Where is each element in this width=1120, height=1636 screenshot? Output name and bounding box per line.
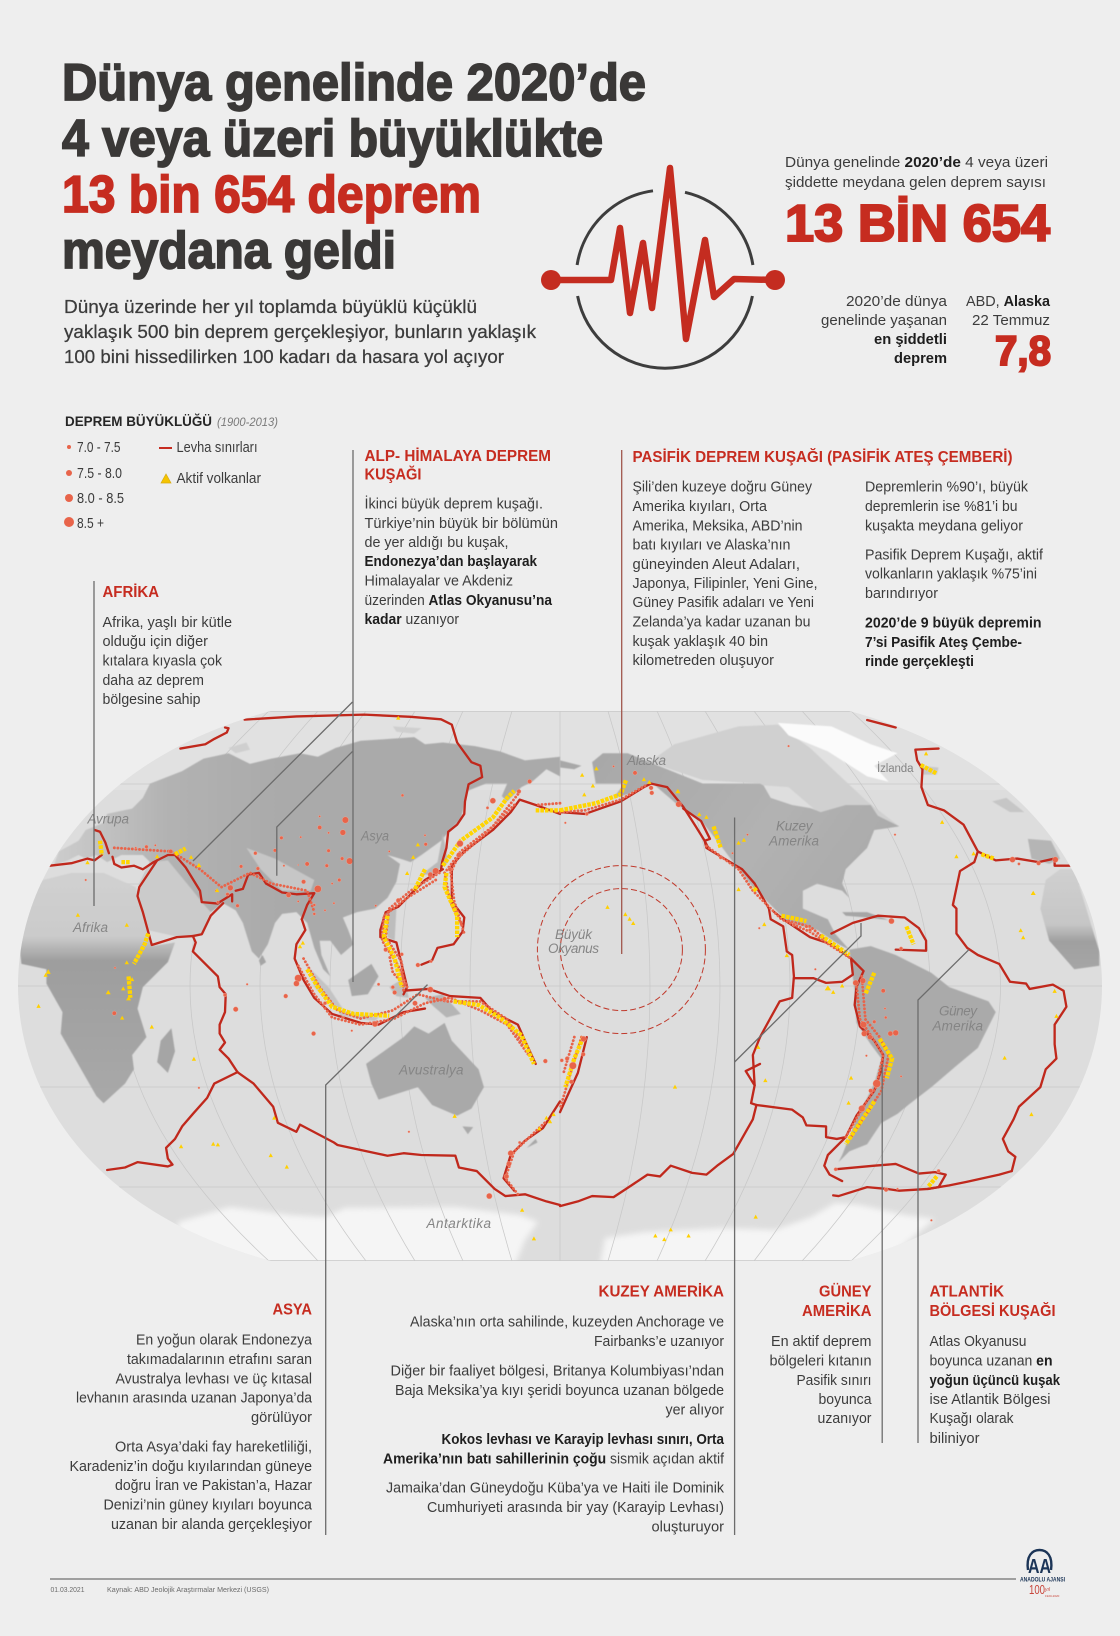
- panel: Asya: Denizi’nin güney kıyıları boyunca: [104, 1498, 313, 1514]
- panel: Atlantik bölgesi kuşağı: Kuşağı olarak: [930, 1411, 1014, 1427]
- panel: Afrika: AFRİKA: [102, 583, 159, 601]
- logo: Anadolu Ajansı: 100: [1029, 1582, 1045, 1597]
- logo: Anadolu Ajansı: [1020, 1550, 1065, 1598]
- stat: yearly earthquake count: şiddette meydana gelen deprem sayısı: [785, 175, 1046, 191]
- panel: Alp-Himalaya deprem kuşağı: KUŞAĞI: [364, 464, 422, 484]
- title: 4 veya üzeri büyüklükte: [62, 110, 603, 168]
- panel: Güney Amerika: AMERİKA: [802, 1302, 872, 1320]
- legend: (1900-2013): [217, 415, 278, 429]
- panel: Pasifik deprem kuşağı: Japonya, Filipinler, Yeni Gine,: [632, 576, 818, 592]
- orange small quake chains: [560, 785, 889, 1137]
- panel: Kuzey Amerika: Alaska’nın orta sahilinde, kuzeyden Anchorage ve: [410, 1314, 724, 1330]
- Antarctica: [178, 1203, 935, 1265]
- panel: Pasifik deprem kuşağı: rinde gerçekleşti: [865, 654, 974, 670]
- legend: 7.0 - 7.5: [77, 440, 120, 456]
- panel: Pasifik deprem kuşağı: Güney Pasifik adaları ve Yeni: [632, 595, 814, 611]
- panel: Güney Amerika: boyunca: [818, 1392, 872, 1408]
- panel: Pasifik deprem kuşağı: volkanların yaklaşık %75’ini: [865, 566, 1037, 582]
- panel: Pasifik deprem kuşağı: Pasifik Deprem Kuşağı, aktif: [865, 548, 1044, 564]
- panel: Atlantik bölgesi kuşağı: ise Atlantik Bölgesi: [930, 1392, 1050, 1408]
- panel: Asya: Karadeniz’in doğu kıyılarından güneye: [70, 1459, 312, 1475]
- panel: Güney Amerika: En aktif deprem: [771, 1334, 872, 1350]
- title: meydana geldi: [62, 222, 396, 280]
- stat: strongest earthquake: genelinde yaşanan: [821, 313, 947, 329]
- stat: strongest earthquake: 2020’de dünya: [846, 294, 948, 310]
- panel: Alp-Himalaya deprem kuşağı: Himalayalar ve Akdeniz: [364, 574, 513, 590]
- legend: 8.0 - 8.5: [77, 491, 124, 507]
- panel: Güney Amerika: uzanıyor: [818, 1411, 872, 1427]
- world map: [0, 700, 1120, 1270]
- map labels: Alaska: [626, 753, 666, 768]
- title: 13 bin 654 deprem: [62, 166, 481, 224]
- panel: Güney Amerika: [770, 1282, 872, 1427]
- stat: strongest earthquake: ABD, Alaska: [966, 294, 1051, 310]
- panel: Kuzey Amerika: Cumhuriyeti arasında bir yay (Karayip Levhası): [427, 1500, 724, 1516]
- graticule: [0, 711, 1120, 1261]
- map labels: [72, 753, 983, 1231]
- panel: Alp-Himalaya deprem kuşağı: Endonezya’dan başlayarak: [364, 554, 538, 570]
- panel: Kuzey Amerika: Fairbanks’e uzanıyor: [594, 1334, 724, 1350]
- panel: Kuzey Amerika: Amerika’nın batı sahillerinin çoğu sismik açıdan aktif: [383, 1452, 725, 1468]
- panel: Pasifik deprem kuşağı: Amerika, Meksika, ABD’nin: [632, 518, 802, 534]
- panel: Pasifik deprem kuşağı: kuşakta meydana geliyor: [865, 518, 1023, 534]
- panel: Pasifik deprem kuşağı: Amerika kıyıları, Orta: [632, 499, 768, 515]
- plate boundaries: [560, 720, 1071, 1206]
- panel: Pasifik deprem kuşağı: kilometreden oluşuyor: [632, 653, 774, 669]
- subtitle text block: 100 bini hissedilirken 100 kadarı da hasara yol açıyor: [64, 346, 504, 367]
- plate boundaries: [50, 715, 560, 1205]
- panel: Pasifik deprem kuşağı: kuşak yaklaşık 40 bin: [632, 634, 768, 650]
- footer source line: Kaynak: ABD Jeolojik Araştırmalar Merkezi (USGS): [107, 1587, 269, 1594]
- panel: Asya: Orta Asya’daki fay hareketliliği,: [115, 1440, 312, 1456]
- map labels: Büyük: [555, 927, 593, 942]
- map labels: Güney: [939, 1004, 978, 1018]
- subtitle text block: Dünya üzerinde her yıl toplamda büyüklü küçüklü: [64, 296, 477, 317]
- map labels: Okyanus: [548, 941, 599, 956]
- panel: Asya: takımadalarının etrafını saran: [127, 1352, 312, 1368]
- panel: Kuzey Amerika: [383, 1282, 725, 1536]
- stat: yearly earthquake count: 13 BİN 654: [785, 195, 1050, 253]
- panel: Pasifik deprem kuşağı: barındırıyor: [865, 586, 938, 602]
- panel: Kuzey Amerika: KUZEY AMERİKA: [598, 1282, 724, 1300]
- panel: Kuzey Amerika: Kokos levhası ve Karayip levhası sınırı, Orta: [442, 1432, 725, 1448]
- panel: Güney Amerika: bölgeleri kıtanın: [770, 1354, 872, 1370]
- map labels: Amerika: [768, 834, 819, 848]
- map labels: Avustralya: [398, 1062, 464, 1078]
- panel: Afrika: [102, 583, 232, 708]
- logo: Anadolu Ajansı: ANADOLU AJANSI: [1020, 1576, 1065, 1584]
- yellow volcano bands: [560, 765, 994, 1187]
- dashed epicentre circles: [537, 866, 705, 1034]
- subtitle text block: [64, 296, 537, 367]
- panel: Pasifik deprem kuşağı: depremlerin ise %81’i bu: [865, 499, 1018, 515]
- panel: Pasifik deprem kuşağı: 7’si Pasifik Ateş Çembe-: [865, 635, 1022, 651]
- panel: Kuzey Amerika: Diğer bir faaliyet bölgesi, Britanya Kolumbiyası’ndan: [390, 1364, 724, 1380]
- panel: Kuzey Amerika: yer alıyor: [666, 1402, 724, 1418]
- logo: Anadolu Ajansı: 1920-2020: [1045, 1594, 1060, 1598]
- panel: Pasifik deprem kuşağı: güneyinden Aleut Adaları,: [632, 557, 800, 573]
- panel: Atlantik bölgesi kuşağı: [930, 1282, 1061, 1447]
- volcano triangles: [580, 751, 1059, 1241]
- panel: Atlantik bölgesi kuşağı: biliniyor: [930, 1431, 980, 1447]
- orange small quake chains: [114, 794, 560, 1194]
- panel: Alp-Himalaya deprem kuşağı: ALP- HİMALAYA DEPREM: [364, 447, 551, 465]
- panel: Asya: görülüyor: [251, 1410, 312, 1426]
- panel: Atlantik bölgesi kuşağı: Atlas Okyanusu: [930, 1334, 1026, 1350]
- panel: Kuzey Amerika: Baja Meksika’ya kıyı şeridi boyunca uzanan bölgede: [395, 1383, 724, 1399]
- map labels: Amerika: [932, 1018, 983, 1034]
- stat: strongest earthquake: [821, 294, 1051, 374]
- panel: Asya: ASYA: [272, 1302, 312, 1318]
- stat: strongest earthquake: 22 Temmuz: [972, 313, 1050, 329]
- stat: yearly earthquake count: [785, 155, 1050, 253]
- legend: [64, 412, 278, 532]
- legend: Levha sınırları: [176, 440, 258, 456]
- panel: Pasifik deprem kuşağı: batı kıyıları ve Alaska’nın: [632, 538, 790, 554]
- panel: Alp-Himalaya deprem kuşağı: üzerinden Atlas Okyanusu’na: [364, 593, 553, 609]
- panel: Pasifik deprem kuşağı: Depremlerin %90’ı, büyük: [865, 480, 1029, 496]
- stat: yearly earthquake count: Dünya genelinde 2020’de 4 veya üzeri: [785, 155, 1048, 171]
- panel: Pasifik deprem kuşağı: [632, 447, 1044, 670]
- stat: strongest earthquake: 7,8: [995, 327, 1051, 374]
- stat: strongest earthquake: deprem: [894, 351, 947, 367]
- panel: Alp-Himalaya deprem kuşağı: kadar uzanıyor: [364, 612, 459, 628]
- panel: Asya: levhanın arasında uzanan Japonya’da: [76, 1390, 313, 1406]
- panel: Asya: Avustralya levhası ve üç kıtasal: [116, 1372, 312, 1388]
- panel: Asya: [70, 1302, 313, 1533]
- quake dots: [85, 779, 547, 1199]
- map labels: Asya: [360, 828, 389, 844]
- panel: Pasifik deprem kuşağı: Zelanda’ya kadar uzanan bu: [632, 614, 810, 630]
- continents east: [18, 726, 560, 1148]
- title: Dünya genelinde 2020’de: [62, 54, 646, 112]
- panel: Asya: uzanan bir alanda gerçekleşiyor: [111, 1517, 312, 1533]
- panel: Alp-Himalaya deprem kuşağı: İkinci büyük deprem kuşağı.: [364, 494, 543, 512]
- panel: Kuzey Amerika: Jamaika’dan Güneydoğu Küba’ya ve Haiti ile Dominik: [386, 1480, 725, 1496]
- panel: Pasifik deprem kuşağı: PASİFİK DEPREM KUŞAĞI (PASİFİK ATEŞ ÇEMBERİ): [632, 447, 1012, 466]
- logo: Anadolu Ajansı: yıl: [1044, 1587, 1051, 1593]
- panel: Güney Amerika: Pasifik sınırı: [796, 1373, 872, 1389]
- land and data: Eastern hemisphere side: [18, 715, 560, 1240]
- callout leader lines: [94, 450, 969, 1535]
- panel: Atlantik bölgesi kuşağı: ATLANTİK: [930, 1282, 1004, 1300]
- stat: strongest earthquake: en şiddetli: [874, 332, 947, 348]
- continents west: [560, 723, 1099, 1162]
- panel: Afrika: bölgesine sahip: [102, 692, 200, 708]
- panel: Kuzey Amerika: oluşturuyor: [652, 1520, 724, 1536]
- panel: Alp-Himalaya deprem kuşağı: de yer aldığı bu kuşak,: [364, 535, 508, 551]
- panel: Pasifik deprem kuşağı: 2020’de 9 büyük depremin: [865, 616, 1042, 632]
- icon: seismograph in a circle: [541, 168, 785, 368]
- title: [62, 54, 646, 280]
- panel: Alp-Himalaya deprem kuşağı: [364, 447, 558, 628]
- legend: Aktif volkanlar: [176, 471, 261, 487]
- map labels: Antarktika: [426, 1216, 491, 1231]
- legend: 7.5 - 8.0: [77, 466, 122, 482]
- legend: 8.5 +: [77, 516, 104, 532]
- volcano triangles: [36, 716, 556, 1240]
- panel: Güney Amerika: GÜNEY: [819, 1282, 872, 1300]
- subtitle text block: yaklaşık 500 bin deprem gerçekleşiyor, bunların yaklaşık: [64, 321, 537, 342]
- footer source line: 01.03.2021: [50, 1587, 85, 1594]
- quake dots: [560, 745, 1058, 1221]
- map labels: İzlanda: [877, 762, 914, 775]
- footer source line: [50, 1579, 1016, 1594]
- map labels: Avrupa: [86, 812, 129, 826]
- panel: Pasifik deprem kuşağı: Şili’den kuzeye doğru Güney: [632, 480, 813, 496]
- land and data: Western hemisphere side: [560, 720, 1099, 1241]
- panel: Atlantik bölgesi kuşağı: yoğun üçüncü kuşak: [930, 1373, 1061, 1389]
- logo: Anadolu Ajansı: AA: [1028, 1556, 1051, 1578]
- panel: Asya: En yoğun olarak Endonezya: [136, 1332, 313, 1348]
- map labels: Kuzey: [776, 818, 814, 834]
- map labels: Afrika: [72, 920, 108, 935]
- panel: Asya: doğru İran ve Pakistan’a, Hazar: [115, 1476, 312, 1494]
- panel: Afrika: Afrika, yaşlı bir kütle: [102, 615, 232, 631]
- panel: Atlantik bölgesi kuşağı: BÖLGESİ KUŞAĞI: [930, 1301, 1056, 1320]
- panel: Afrika: kıtalara kıyasla çok: [102, 654, 223, 670]
- panel: Atlantik bölgesi kuşağı: boyunca uzanan en: [930, 1354, 1053, 1370]
- panel: Afrika: olduğu için diğer: [102, 634, 208, 650]
- panel: Alp-Himalaya deprem kuşağı: Türkiye’nin büyük bir bölümün: [364, 516, 558, 532]
- legend: DEPREM BÜYÜKLÜĞÜ: [65, 412, 212, 429]
- yellow volcano bands: [100, 791, 560, 1064]
- panel: Afrika: daha az deprem: [102, 673, 204, 689]
